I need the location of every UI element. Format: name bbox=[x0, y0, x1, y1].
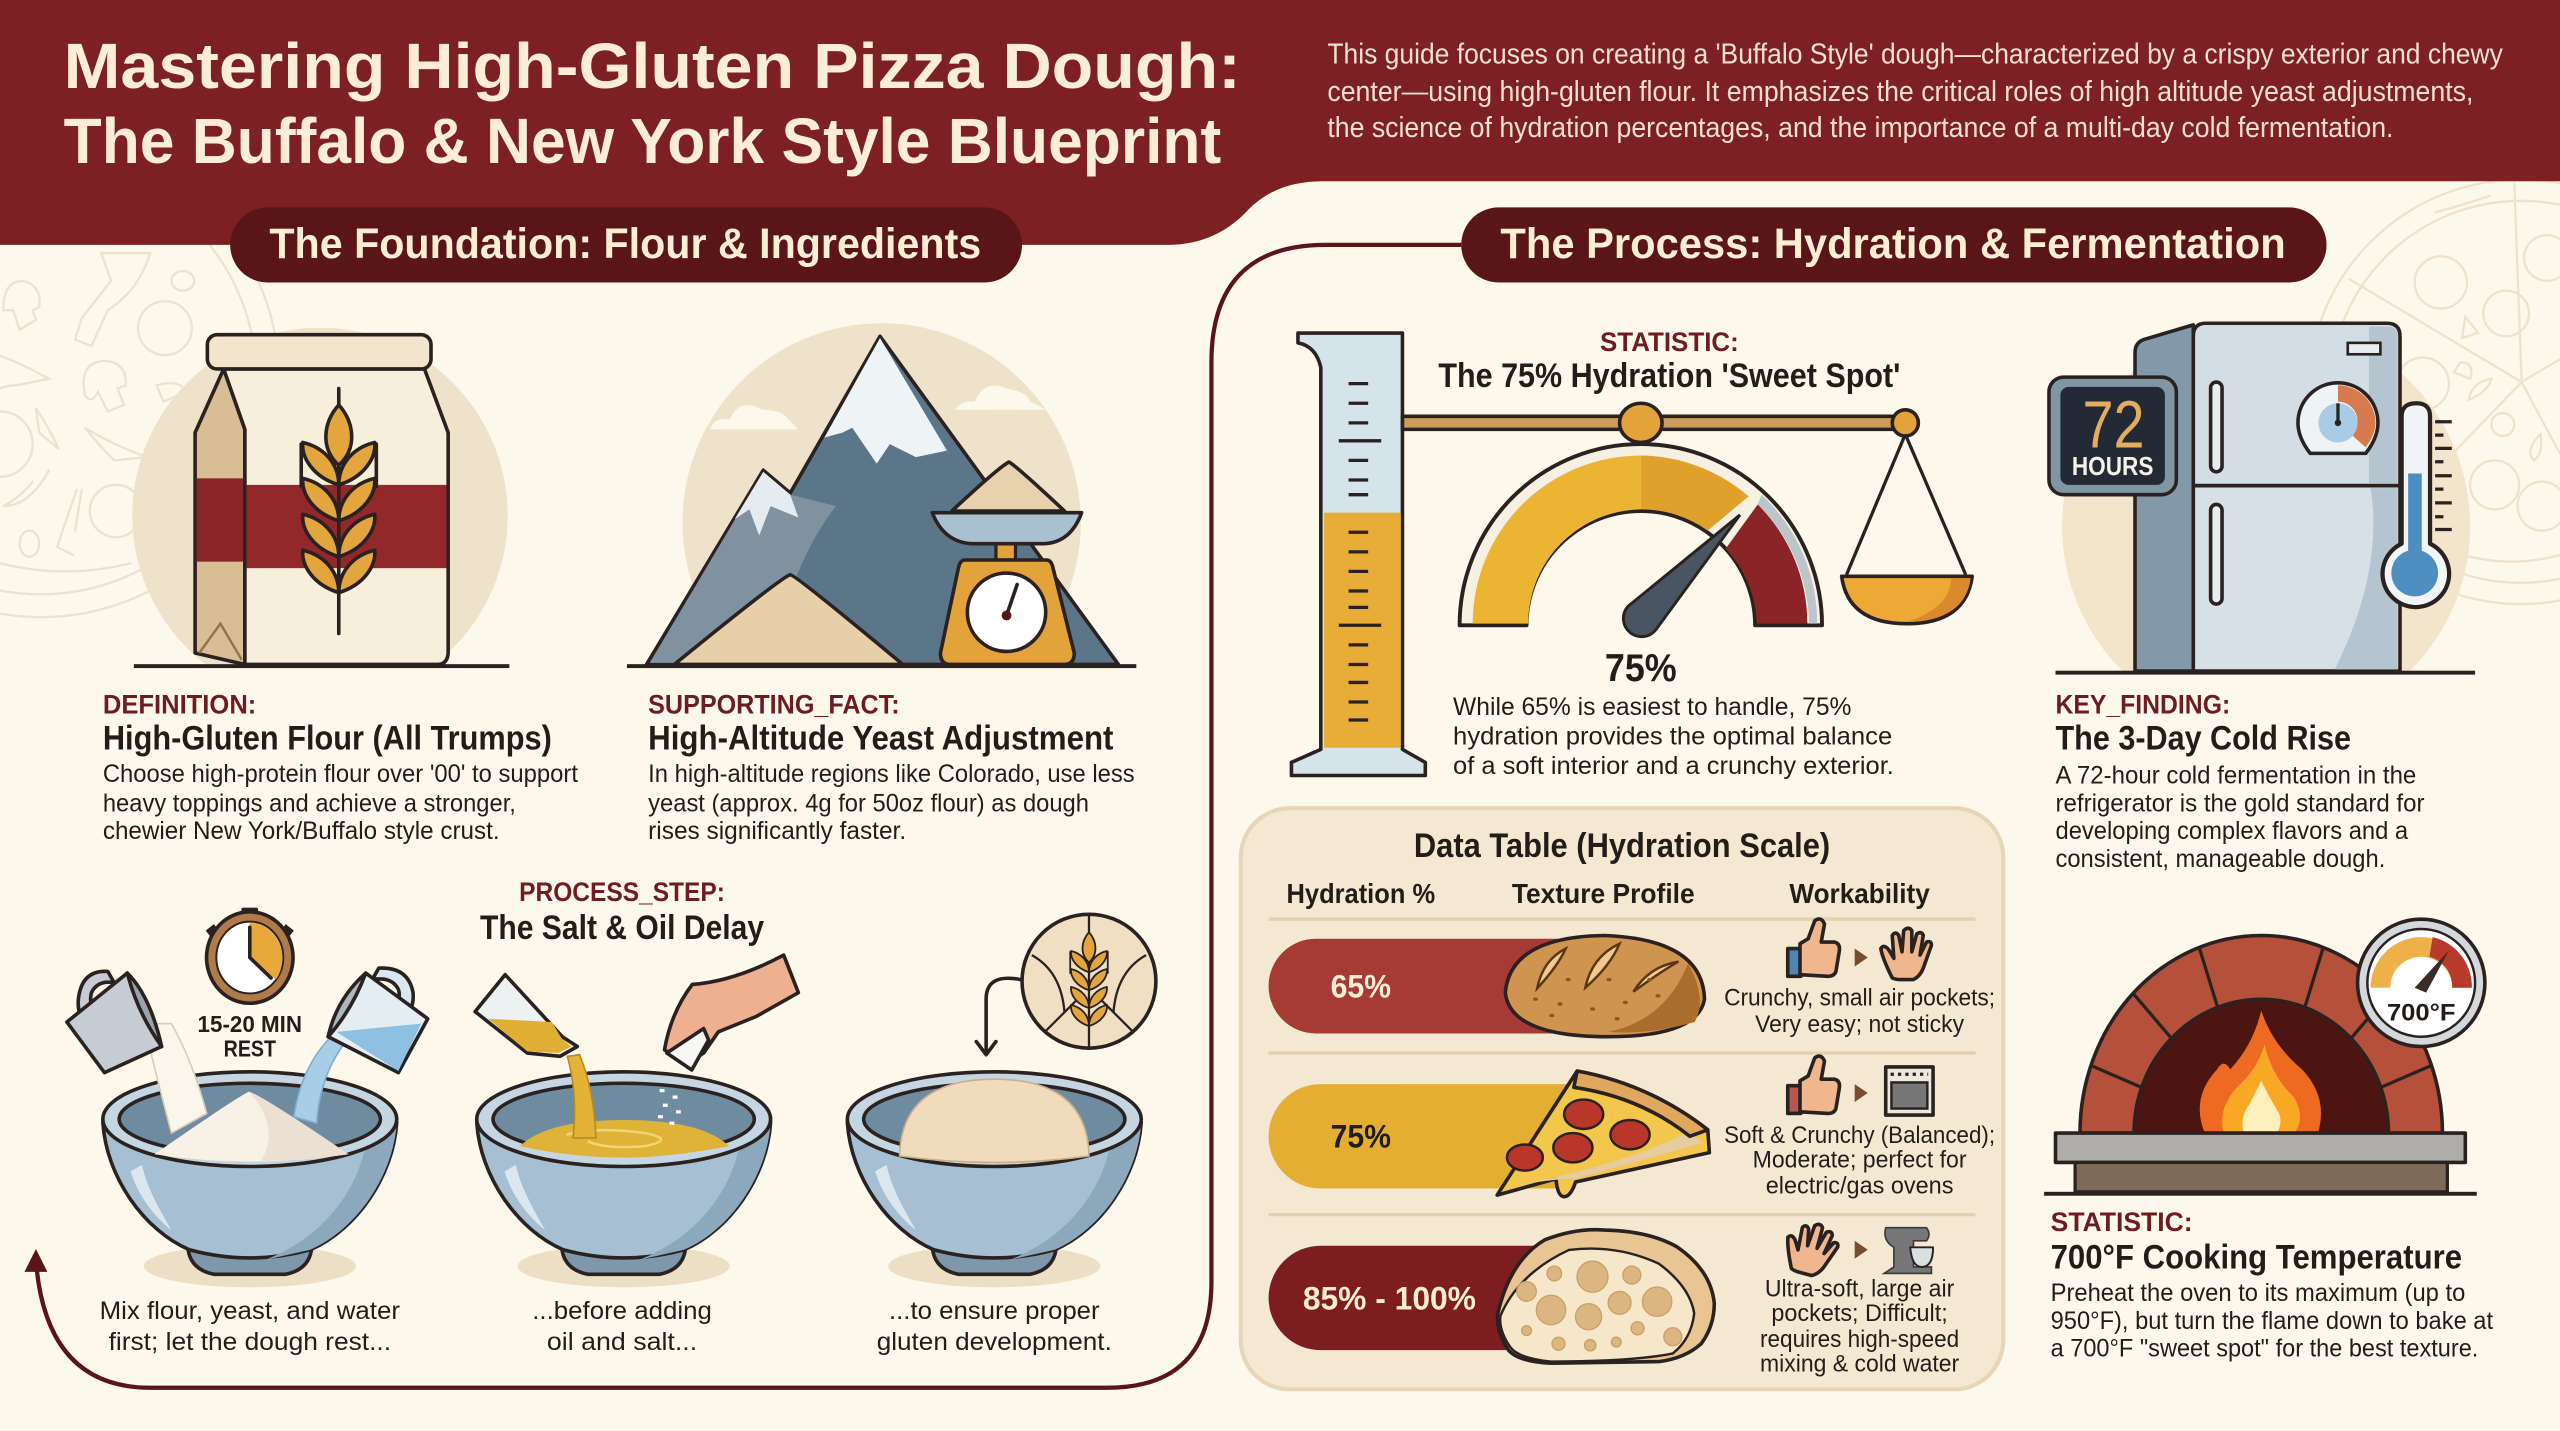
label: rest time bbox=[198, 1011, 302, 1061]
workability text bbox=[1724, 986, 1995, 1038]
captions: salt and oil delay: ...before adding bbox=[532, 1297, 712, 1325]
text block: definition: Choose high-protein flour over '00' to support bbox=[103, 760, 578, 788]
heading: the foundation: The Foundation: Flour & Ingredients bbox=[269, 220, 981, 267]
text block: hydration statistic: While 65% is easiest to handle, 75% bbox=[1453, 693, 1851, 721]
text block: supporting fact: SUPPORTING_FACT: bbox=[648, 689, 900, 719]
icons: hand to mixer bbox=[1780, 1217, 1933, 1280]
table column headers bbox=[1287, 878, 1930, 909]
text block: supporting fact: High-Altitude Yeast Adjustment bbox=[648, 719, 1113, 757]
text block: supporting fact: rises significantly faster. bbox=[648, 817, 906, 845]
table row: 75 percent bbox=[1269, 1056, 1995, 1199]
heading: process step bbox=[480, 877, 764, 947]
workability text: Crunchy, small air pockets; bbox=[1724, 986, 1995, 1012]
text block: hydration statistic bbox=[1438, 327, 1900, 780]
workability text: Soft & Crunchy (Balanced); bbox=[1724, 1123, 1995, 1149]
label: rest time: 15-20 MIN bbox=[198, 1011, 302, 1037]
text block: definition: heavy toppings and achieve a stronger, bbox=[103, 789, 516, 817]
icon: arrow to dough bbox=[976, 978, 1020, 1055]
workability text: mixing & cold water bbox=[1760, 1351, 1959, 1377]
workability text: requires high-speed bbox=[1760, 1327, 1959, 1353]
text block: cooking temperature bbox=[2051, 1207, 2493, 1363]
fridge dial bbox=[2298, 383, 2378, 453]
ground line under mountain bbox=[627, 664, 1136, 668]
intro paragraph: This guide focuses on creating a 'Buffalo Style' dough—characterized by a crispy exterior and chewy bbox=[1327, 39, 2504, 71]
icon: oil bottle bbox=[475, 975, 577, 1056]
text block: key finding: consistent, manageable dough. bbox=[2056, 845, 2385, 873]
icon: bowl with oil bbox=[477, 1072, 771, 1287]
workability text: Ultra-soft, large air bbox=[1765, 1276, 1954, 1302]
intro paragraph bbox=[1327, 39, 2504, 144]
text block: key finding: A 72-hour cold fermentation in the bbox=[2056, 762, 2416, 790]
icons: thumb to oven bbox=[1788, 1056, 1933, 1115]
icon: hand with salt bbox=[658, 955, 798, 1123]
text block: hydration statistic: of a soft interior and a crunchy exterior. bbox=[1453, 752, 1894, 780]
heading: the process bbox=[1461, 207, 2327, 282]
intro paragraph: center—using high-gluten flour. It emphasizes the critical roles of high altitude yeast adjustments, bbox=[1327, 76, 2473, 108]
icon: oven temperature gauge bbox=[2358, 919, 2485, 1047]
captions: salt and oil delay bbox=[100, 1297, 1112, 1356]
chart: hydration gauge bbox=[1460, 444, 1822, 637]
icon: 72 hours timer: HOURS bbox=[2072, 451, 2153, 481]
step 1: mix flour and water bbox=[67, 909, 428, 1287]
icon: 72 hours timer: 72 bbox=[2082, 387, 2144, 462]
step 2: add oil and salt bbox=[475, 955, 798, 1287]
gauge needle bbox=[1623, 515, 1740, 637]
heading: process step: PROCESS_STEP: bbox=[519, 877, 725, 907]
icon: oven temperature gauge: 700°F bbox=[2387, 999, 2456, 1026]
text block: supporting fact: In high-altitude regions like Colorado, use less bbox=[648, 760, 1135, 788]
text block: supporting fact: yeast (approx. 4g for 50oz flour) as dough bbox=[648, 789, 1089, 817]
text block: definition: chewier New York/Buffalo style crust. bbox=[103, 817, 500, 845]
text block: cooking temperature: 950°F), but turn the flame down to bake at bbox=[2051, 1307, 2493, 1335]
icon: mountain with scale bbox=[647, 323, 1118, 664]
text block: definition bbox=[103, 689, 578, 845]
table column headers: Hydration % bbox=[1287, 878, 1435, 909]
icon: brick pizza oven bbox=[2056, 935, 2465, 1192]
icon: balance beam and pan bbox=[1402, 403, 1972, 624]
workability text bbox=[1724, 1123, 1995, 1199]
icon: wheat close-up bbox=[1022, 914, 1156, 1048]
value: 75 percent: 75% bbox=[1605, 647, 1677, 690]
heading: process step: The Salt & Oil Delay bbox=[480, 909, 764, 947]
text block: key finding: refrigerator is the gold standard for bbox=[2056, 789, 2424, 817]
text block: hydration statistic: hydration provides the optimal balance bbox=[1453, 722, 1892, 750]
captions: salt and oil delay: first; let the dough rest... bbox=[109, 1328, 391, 1356]
text block: hydration statistic: The 75% Hydration 'Sweet Spot' bbox=[1438, 357, 1900, 395]
icon: dough ball bbox=[900, 1079, 1089, 1162]
workability text: Moderate; perfect for bbox=[1753, 1147, 1967, 1173]
icon: bowl with flour bbox=[103, 1072, 397, 1287]
thermometer bbox=[2383, 403, 2452, 607]
icon: bread loaf bbox=[1505, 935, 1704, 1037]
text block: key finding bbox=[2056, 689, 2424, 873]
text block: definition: High-Gluten Flour (All Trumps) bbox=[103, 719, 552, 757]
text block: hydration statistic: STATISTIC: bbox=[1600, 327, 1739, 357]
step 3: gluten development bbox=[847, 914, 1156, 1287]
decorative pizza outline right bbox=[2309, 180, 2560, 604]
captions: salt and oil delay: gluten development. bbox=[877, 1328, 1112, 1356]
text block: supporting fact bbox=[648, 689, 1135, 845]
icon: bowl with dough bbox=[847, 1072, 1141, 1287]
icon: 72 hours timer bbox=[2049, 377, 2176, 495]
captions: salt and oil delay: ...to ensure proper bbox=[889, 1297, 1100, 1325]
table row: 65 percent: 65% bbox=[1331, 968, 1391, 1005]
text block: cooking temperature: a 700°F "sweet spot" for the best texture. bbox=[2051, 1335, 2478, 1363]
heading: the process: The Process: Hydration & Fermentation bbox=[1500, 220, 2286, 267]
table column headers: Texture Profile bbox=[1512, 878, 1695, 909]
ground line under oven bbox=[2044, 1192, 2477, 1196]
icon: stopwatch bbox=[206, 909, 294, 1003]
icon: water pitcher bbox=[294, 968, 428, 1123]
table column headers: Workability bbox=[1789, 878, 1930, 909]
ground line under bag bbox=[134, 664, 509, 668]
text block: cooking temperature: Preheat the oven to its maximum (up to bbox=[2051, 1279, 2465, 1307]
ground line under fridge bbox=[2056, 671, 2475, 675]
icon: oil pool bbox=[520, 1055, 729, 1158]
table row: 75 percent: 75% bbox=[1331, 1118, 1391, 1155]
panel: data table bbox=[1241, 808, 2003, 1389]
heading: the foundation bbox=[230, 207, 1022, 282]
workability text: electric/gas ovens bbox=[1766, 1173, 1953, 1199]
text block: cooking temperature: 700°F Cooking Temperature bbox=[2051, 1239, 2462, 1277]
header banner bbox=[0, 0, 2560, 245]
intro paragraph: the science of hydration percentages, and the importance of a multi-day cold fermentation. bbox=[1327, 112, 2393, 144]
title: The Buffalo & New York Style Blueprint bbox=[64, 106, 1221, 177]
table title: Data Table (Hydration Scale) bbox=[1414, 827, 1830, 865]
label: rest time: REST bbox=[224, 1035, 276, 1061]
icon: measuring cylinder bbox=[1291, 333, 1425, 775]
text block: key finding: developing complex flavors and a bbox=[2056, 817, 2409, 845]
icon: flour bag bbox=[132, 328, 508, 664]
icons: thumb to hand bbox=[1788, 919, 1931, 980]
captions: salt and oil delay: Mix flour, yeast, and water bbox=[100, 1297, 400, 1325]
workability text bbox=[1760, 1276, 1959, 1377]
text block: key finding: KEY_FINDING: bbox=[2056, 689, 2230, 719]
icon: flour pile bbox=[154, 1092, 348, 1162]
text block: key finding: The 3-Day Cold Rise bbox=[2056, 719, 2351, 757]
title bbox=[64, 31, 1241, 177]
icon: pizza slice bbox=[1497, 1071, 1709, 1197]
icon: flour pitcher bbox=[67, 971, 207, 1133]
title: Mastering High-Gluten Pizza Dough: bbox=[64, 31, 1241, 102]
table row: 65 percent bbox=[1269, 919, 1995, 1038]
workability text: Very easy; not sticky bbox=[1755, 1012, 1964, 1038]
flame bbox=[2200, 1011, 2321, 1131]
text block: definition: DEFINITION: bbox=[103, 689, 256, 719]
decorative pizza outline left bbox=[0, 140, 279, 617]
panel outline and return arrow bbox=[24, 245, 1461, 1388]
icon: ciabatta slice bbox=[1497, 1230, 1714, 1363]
workability text: pockets; Difficult; bbox=[1771, 1301, 1948, 1327]
text block: cooking temperature: STATISTIC: bbox=[2051, 1207, 2193, 1237]
table row: 85 to 100 percent bbox=[1269, 1217, 1959, 1377]
table row: 85 to 100 percent: 85% - 100% bbox=[1303, 1279, 1476, 1316]
icon: refrigerator bbox=[2062, 322, 2470, 671]
captions: salt and oil delay: oil and salt... bbox=[547, 1328, 697, 1356]
